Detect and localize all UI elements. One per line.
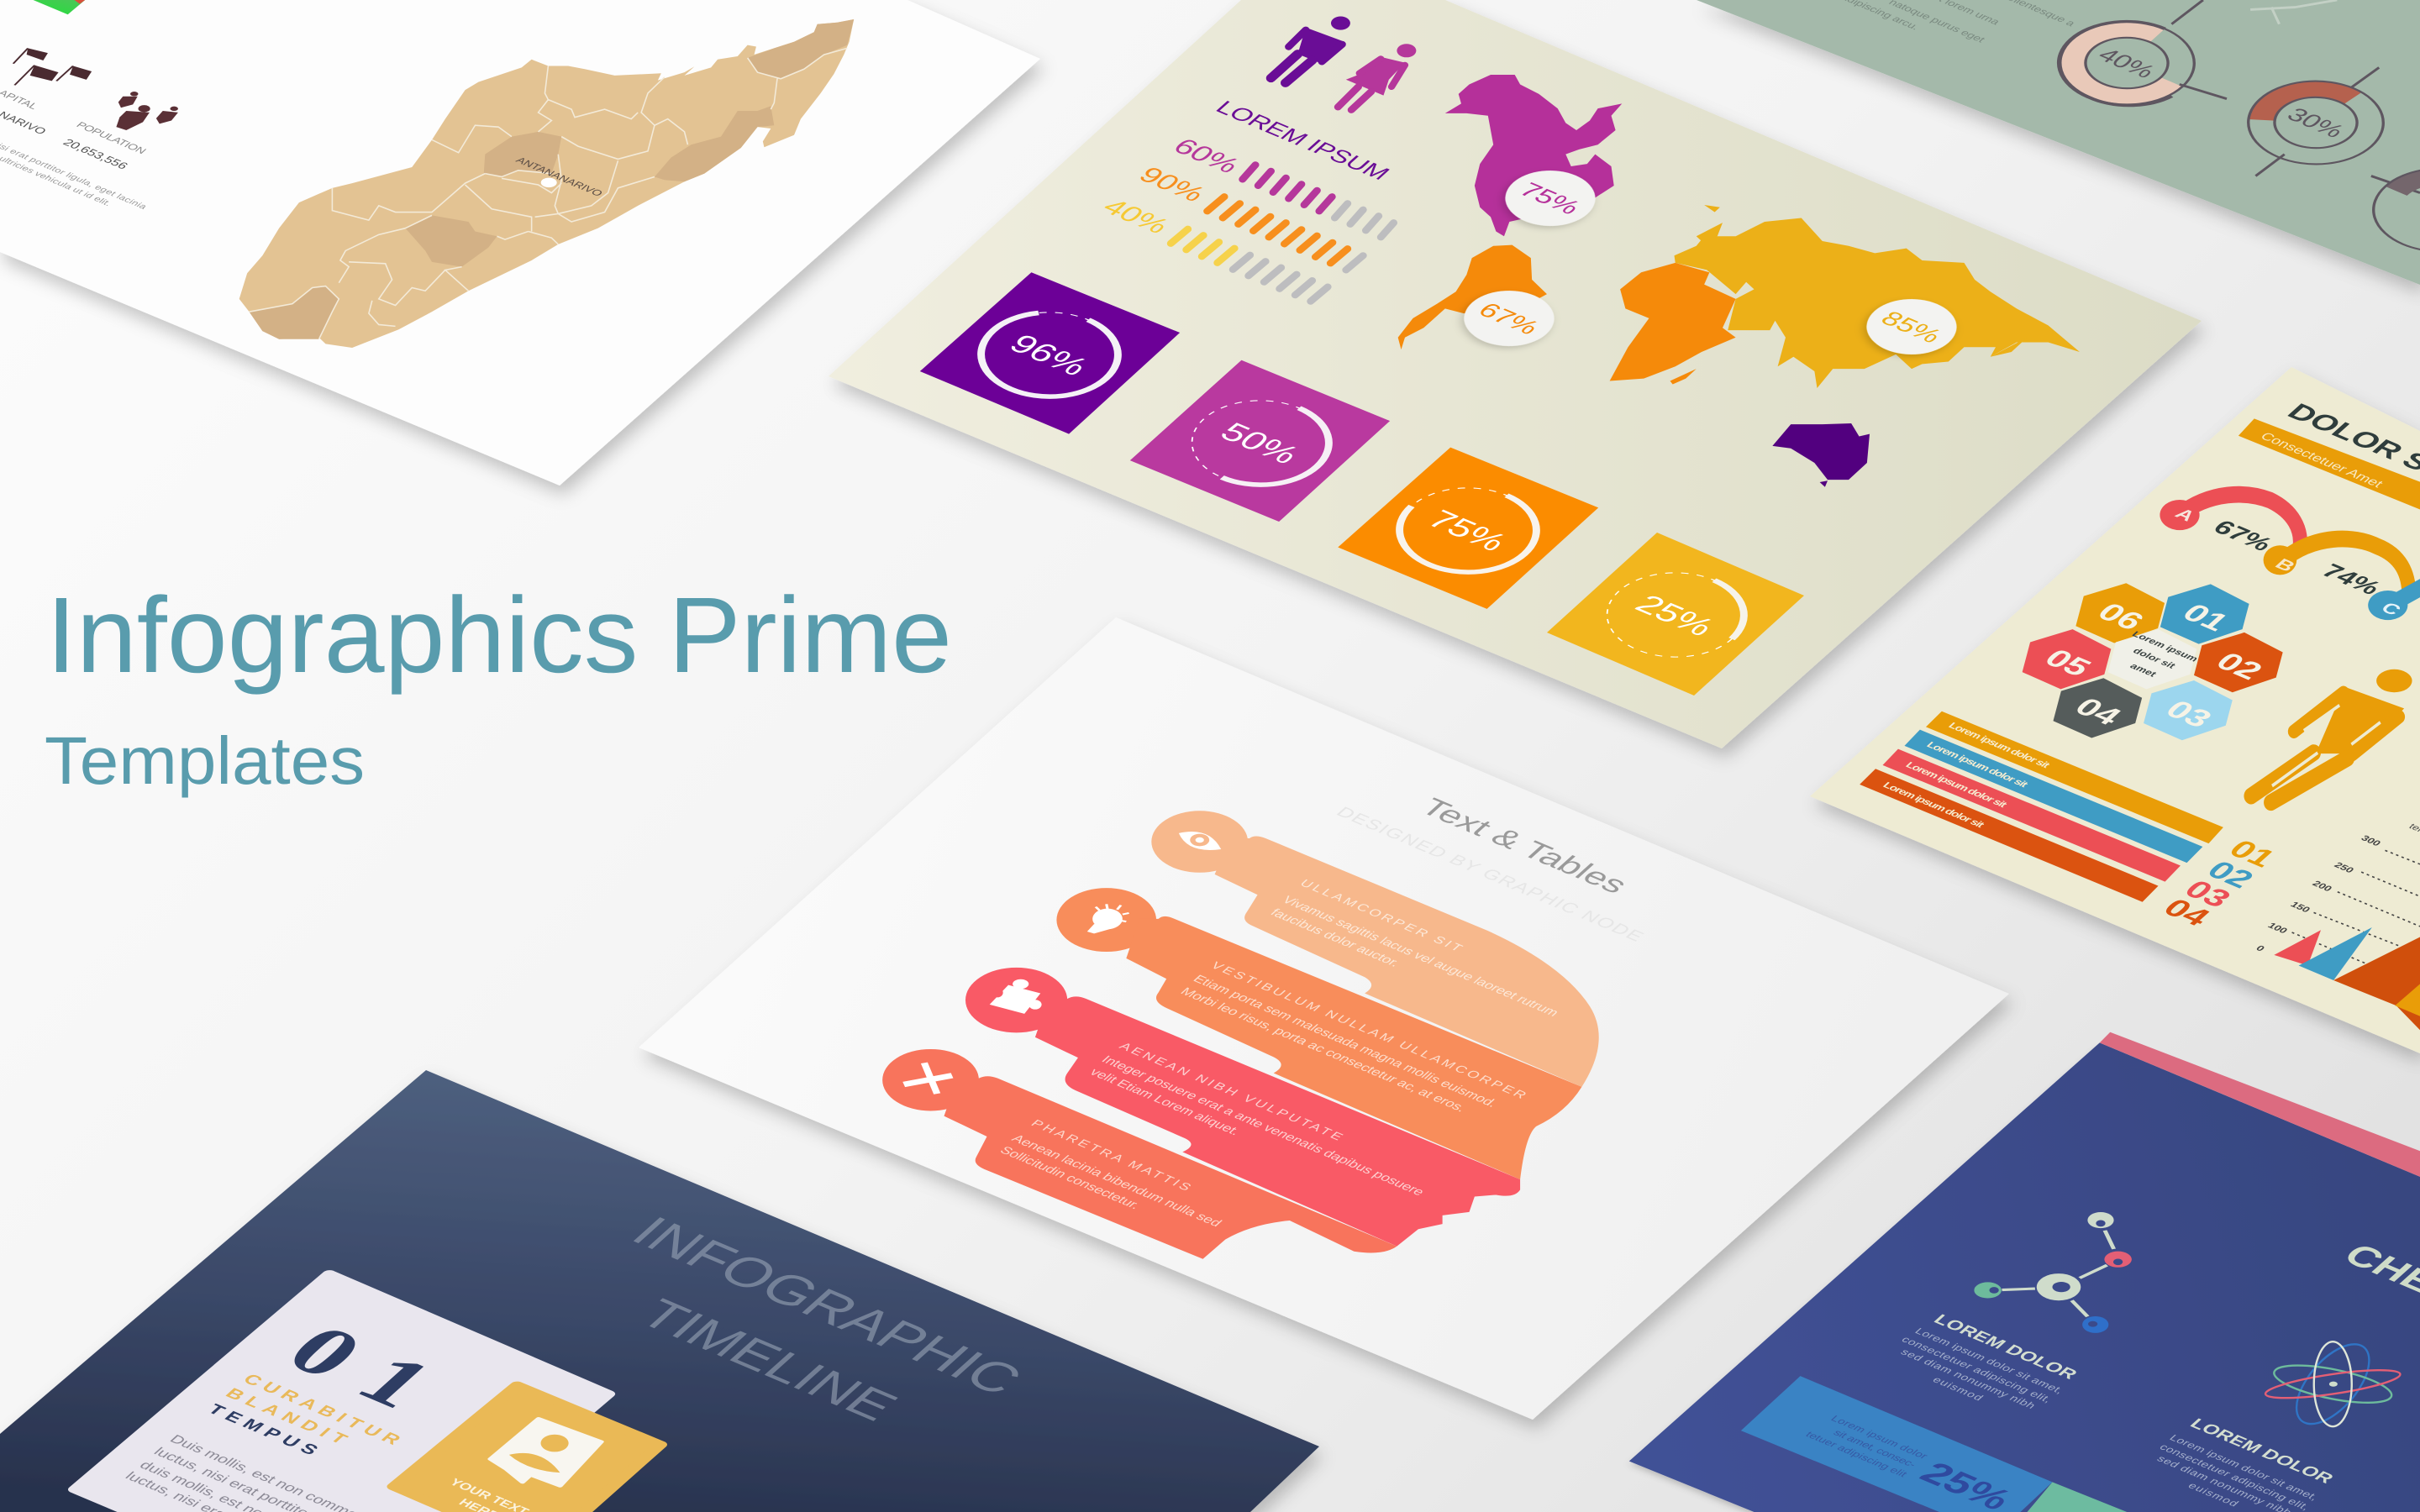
text: stripe labels: Lorem ipsum dolor sit <box>1903 760 2011 810</box>
title: Infographics Prime <box>46 575 952 696</box>
text: stripe numbers <box>2156 835 2282 932</box>
icon: eye <box>1179 832 1221 850</box>
icon: capital marker <box>541 178 557 187</box>
text: band four: PHARETRA MATTIS <box>1028 1118 1194 1193</box>
text: designed by graphic node: DESIGNED BY GRAPHIC NODE <box>1333 804 1648 944</box>
badge: 85 percent eurasia <box>1849 288 1974 365</box>
icon: light bulb <box>1087 904 1129 933</box>
chart: hexagon cluster: 06 <box>2090 598 2151 636</box>
text: molecule block: sed diam nonummy nibh <box>1898 1347 2039 1410</box>
numeral: 01: 01 <box>268 1311 453 1422</box>
badge: 85 percent eurasia: 85% <box>1875 307 1948 347</box>
card: navy sheet <box>0 1070 1319 1512</box>
icon: faint twig <box>2250 0 2337 24</box>
chart: arc C <box>2368 585 2420 620</box>
text: stripe labels: Lorem ipsum dolor sit <box>1946 721 2054 770</box>
text: band one: ULLAMCORPER SIT <box>1297 878 1465 954</box>
card: yellow icon tile <box>394 1385 660 1512</box>
text: molecule block <box>1898 1311 2082 1410</box>
text: blandit: BLANDIT <box>222 1385 352 1447</box>
card: map slide sheet <box>0 0 1040 486</box>
stat: 90 percent: 90% <box>1133 163 1212 207</box>
text: atom block: consectetuer adipiscing elit, <box>2157 1442 2312 1512</box>
text: molecule block: Lorem ipsum dolor sit amet, <box>1912 1326 2066 1395</box>
text: band one: Vivamus sagittis lacus vel augue laoreet rutrum <box>1279 894 1562 1019</box>
text: band two: VESTIBULUM NULLAM ULLAMCORPER <box>1207 960 1529 1101</box>
badge: 75 percent north america: 75% <box>1513 178 1586 218</box>
banner: orange subtitle band <box>2238 418 2420 509</box>
icon: man <box>1271 17 1350 83</box>
text: atom block: LOREM DOLOR <box>2186 1415 2338 1487</box>
icon: molecule <box>1974 1212 2132 1333</box>
chart: hexagon cluster: 02 <box>2208 648 2270 685</box>
icon: orange person <box>2251 669 2412 802</box>
panel: madagascar map slide <box>0 0 1040 486</box>
text: stripe numbers: 04 <box>2156 894 2217 932</box>
text: sage slide copy <box>1839 0 2079 45</box>
text: molecule block: euismod <box>1930 1375 1986 1403</box>
map: eurasia <box>1674 205 2080 388</box>
icon: puzzle piece <box>990 979 1042 1014</box>
chart: hexagon cluster: 05 <box>2037 644 2098 682</box>
text: callout copy: tetuer adipiscing elit <box>1803 1430 1910 1479</box>
panel: chemistry slide <box>1629 1032 2420 1512</box>
text: callout copy: Lorem ipsum dolor <box>1828 1414 1931 1461</box>
text: callout copy: sit amet, consec- <box>1831 1428 1919 1469</box>
chart: triangle chart <box>2254 833 2420 1030</box>
text: stripe labels: Lorem ipsum dolor sit <box>1924 740 2032 790</box>
card: pale yellow sheet <box>1810 367 2420 1053</box>
chart: cropped third donut <box>2347 152 2420 268</box>
chart: connectors for donuts <box>2171 0 2420 193</box>
chart: 40 percent sketch donut: 40% <box>2092 45 2160 82</box>
chart: 30 percent sketch donut: 30% <box>2281 104 2349 142</box>
label: capital city: ANTANANARIVO <box>513 155 606 198</box>
icon: pencil and brush <box>904 1063 952 1094</box>
map: africa <box>1610 263 1736 384</box>
text: atom block: Lorem ipsum dolor sit amet, <box>2167 1433 2321 1502</box>
tile: 96 percent gauge <box>920 272 1180 434</box>
map: north america <box>1445 75 1622 236</box>
text: subtitle: Consectetuer Amet <box>2257 430 2386 490</box>
text: callout copy <box>1803 1414 1931 1479</box>
chart: hexagon cluster <box>2023 583 2283 740</box>
map: australia <box>1772 423 1870 487</box>
text: stripe numbers: 02 <box>2200 856 2260 894</box>
chart: 30 percent sketch donut <box>2212 59 2419 186</box>
card: step one white tile <box>75 1274 608 1512</box>
shape: peach head band <box>1151 811 1599 1087</box>
badge: 75 percent north america <box>1488 160 1612 237</box>
tile: 96 percent gauge: 96% <box>1002 328 1097 381</box>
accent: pink top stripe <box>2100 1032 2420 1177</box>
heading: infographic: INFOGRAPHIC <box>620 1208 1034 1404</box>
panel: dolor sit infographic slide <box>1810 367 2420 1053</box>
chart: triangle chart: 250 <box>2332 860 2357 874</box>
badge: 67 percent south america <box>1447 280 1571 357</box>
chart: dashed bar meters <box>1171 165 1394 302</box>
text: tempus: TEMPUS <box>204 1401 323 1458</box>
stat: 74 percent: 74% <box>2316 560 2386 599</box>
label: population value: 20,653,556 <box>60 138 130 171</box>
panel: world statistics slide <box>829 0 2202 748</box>
tile: 25 percent gauge: 25% <box>1628 589 1723 642</box>
icon: atom <box>2262 1338 2404 1430</box>
icon: woman <box>1338 44 1416 110</box>
text: map description line two: ultricies vehicula ut id elit. <box>0 155 113 207</box>
text: band three: velit Etiam Lorem aliquet. <box>1086 1066 1244 1137</box>
shape: coral head band <box>882 1049 1397 1259</box>
flags and people icons <box>13 0 178 130</box>
text: band two: Etiam porta sem malesuada magna mollis euismod. <box>1190 973 1501 1110</box>
text: band two: Morbi leo risus, porta ac consectetur ac, at eros. <box>1177 985 1470 1114</box>
chart: hexagon cluster: 04 <box>2067 693 2128 731</box>
stat: 40 percent: 40% <box>1097 195 1176 239</box>
chart: arc A <box>2160 495 2300 546</box>
text: atom block: euismod <box>2186 1481 2241 1509</box>
card: white sheet <box>639 617 2009 1420</box>
text: stripe labels <box>1881 721 2054 830</box>
stat: 67 percent: 67% <box>2207 517 2278 555</box>
shape: red head band <box>965 968 1520 1247</box>
heading: lorem ipsum: LOREM IPSUM <box>1210 97 1395 184</box>
tile: 50 percent gauge <box>1130 360 1390 522</box>
callout: blue 25 percent band <box>1741 1376 2052 1512</box>
chart: triangle chart: 150 <box>2288 900 2313 914</box>
text: stripe numbers: 01 <box>2222 835 2282 873</box>
text: band four: Aenean lacinia bibendum nulla sed <box>1008 1132 1225 1229</box>
card: blue sheet <box>1629 1042 2420 1512</box>
tile: 25 percent gauge <box>1547 533 1804 696</box>
shape: orange head band <box>1056 888 1581 1179</box>
chart: hexagon cluster: 01 <box>2175 599 2236 637</box>
text: band one: faucibus dolor auctor. <box>1267 906 1403 969</box>
tile: 75 percent gauge: 75% <box>1420 504 1515 557</box>
tile: 75 percent gauge <box>1338 448 1598 609</box>
panel: navy timeline slide <box>0 1070 1319 1512</box>
panel: text and tables head slide <box>639 617 2009 1420</box>
map: madagascar regions <box>239 19 854 348</box>
subtitle: Templates <box>45 723 365 798</box>
chart: arc B <box>2264 539 2409 595</box>
text: band three: Integer posuere erat a ante venenatis dapibus posuere <box>1098 1053 1428 1198</box>
chart: triangle chart: 200 <box>2310 879 2335 893</box>
tile: 50 percent gauge: 50% <box>1213 417 1307 470</box>
chart: horizontal stripes <box>1860 711 2223 902</box>
heading: timeline: TIMELINE <box>628 1290 909 1429</box>
chart: triangle chart: 0 <box>2254 943 2267 953</box>
badge: 67 percent south america: 67% <box>1472 298 1545 339</box>
stat: 60 percent: 60% <box>1167 134 1246 178</box>
card: sage sheet <box>1697 0 2420 285</box>
text: band three: AENEAN NIBH VULPUTATE <box>1116 1041 1345 1142</box>
label: A: A <box>2171 505 2200 524</box>
chart: hexagon cluster: amet <box>2128 661 2159 679</box>
panel: sage sketch slide <box>1697 0 2420 285</box>
chart: 40 percent sketch donut <box>2033 5 2221 121</box>
map: south america <box>1398 245 1547 349</box>
chart: hexagon cluster: Lorem ipsum <box>2129 629 2201 664</box>
text: band four: Sollicitudin consectetur. <box>997 1144 1144 1211</box>
chart: triangle chart: 100 <box>2265 921 2291 935</box>
label: B: B <box>2271 555 2300 575</box>
text: atom block <box>2154 1415 2338 1512</box>
chart: triangle chart: 300 <box>2359 833 2384 848</box>
label: population heading: POPULATION <box>74 120 149 155</box>
icon: profile bubble <box>491 1419 602 1486</box>
text: stripe labels: Lorem ipsum dolor sit <box>1881 780 1988 830</box>
card: cream sheet <box>829 0 2202 748</box>
text: curabitur: CURABITUR <box>239 1371 405 1447</box>
text: molecule block: consectetuer adipiscing elit, <box>1899 1335 2054 1404</box>
accent: green segment <box>2027 1482 2127 1512</box>
heading: text and tables: Text & Tables <box>1413 794 1634 899</box>
chart: hexagon cluster: dolor sit <box>2130 646 2178 670</box>
chart: hexagon cluster: 03 <box>2158 696 2219 733</box>
text: stripe numbers: 03 <box>2177 875 2238 913</box>
label: C: C <box>2377 599 2406 618</box>
text: molecule block: LOREM DOLOR <box>1930 1311 2082 1383</box>
